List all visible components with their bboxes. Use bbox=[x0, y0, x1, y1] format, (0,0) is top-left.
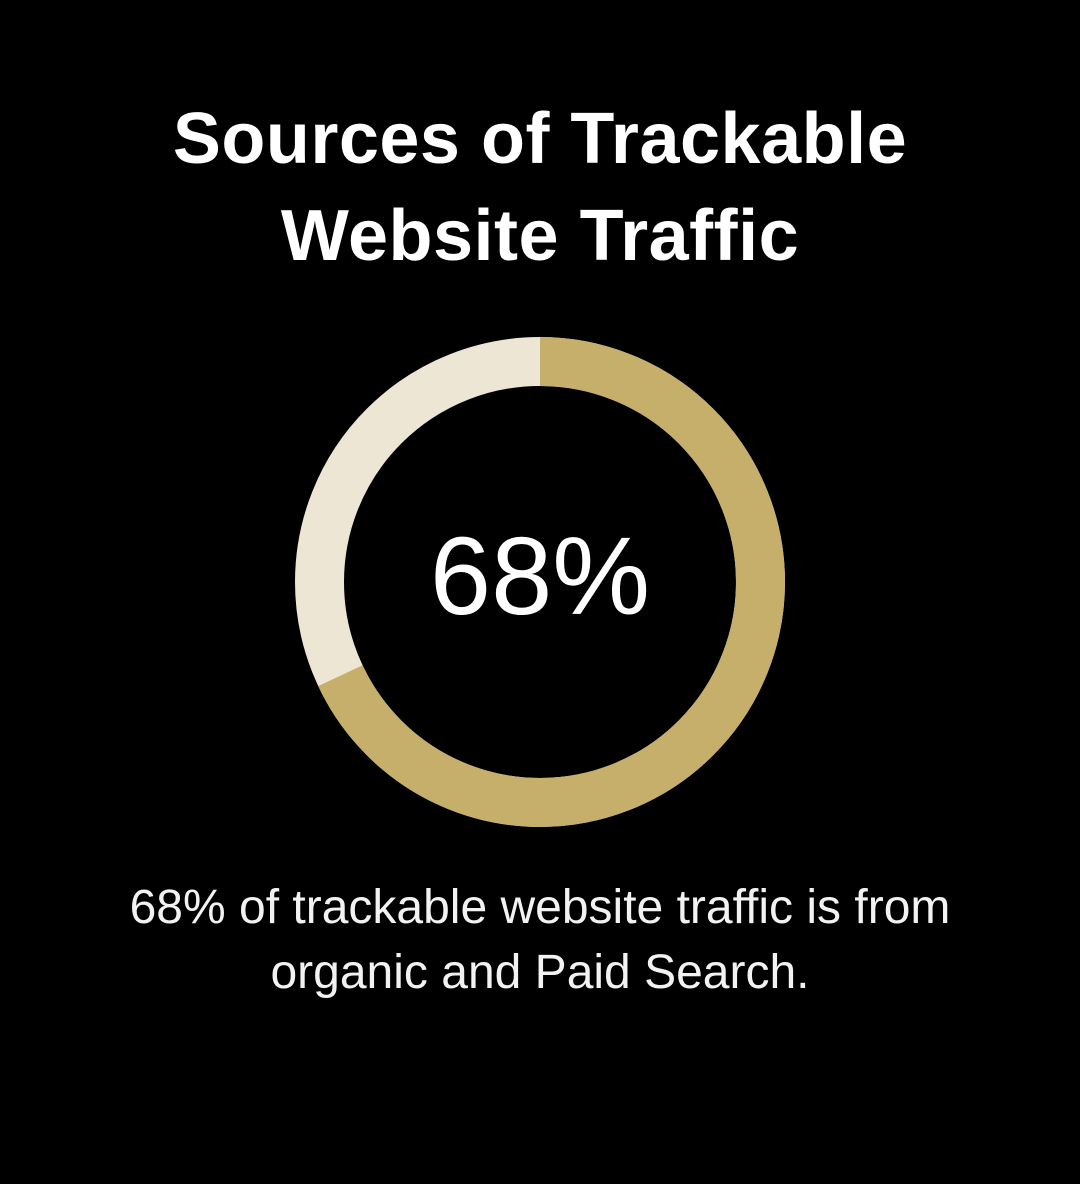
ring: 68% segment bbox=[320, 362, 760, 802]
caption: organic and Paid Search. bbox=[270, 946, 810, 999]
title bbox=[173, 99, 907, 276]
title: Sources of Trackable bbox=[173, 99, 907, 179]
caption: 68% of trackable website traffic is from bbox=[130, 881, 950, 934]
center value: 68% bbox=[430, 515, 650, 638]
ring: remaining share bbox=[320, 362, 760, 802]
caption bbox=[130, 881, 950, 999]
title: Website Traffic bbox=[281, 196, 799, 276]
donut chart bbox=[295, 337, 785, 827]
